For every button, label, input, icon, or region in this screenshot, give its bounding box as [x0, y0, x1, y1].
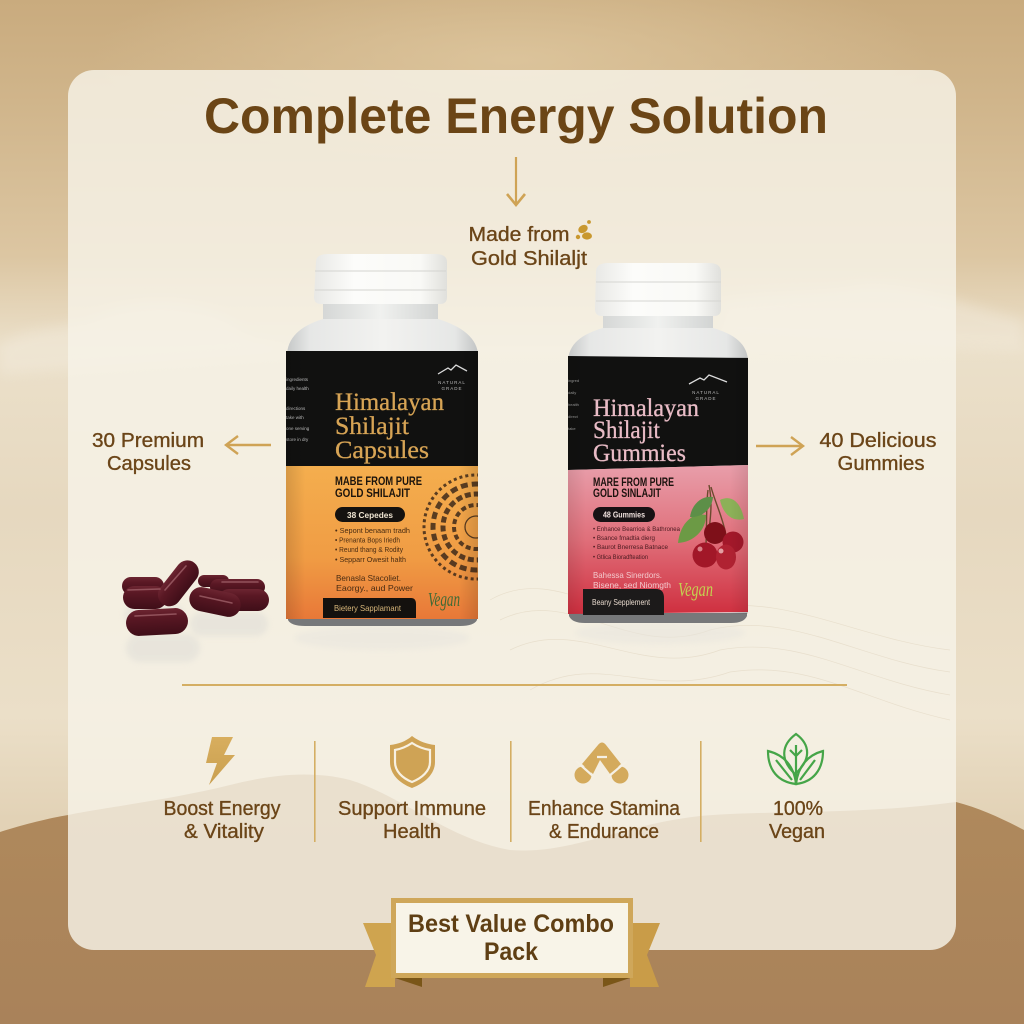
callout: 30 premium capsules — [92, 430, 204, 475]
bottle reflection — [575, 622, 745, 644]
label bullets: • Reund thang & Rodity — [335, 545, 403, 554]
label tagline: Bisene, sed Niomgth — [593, 580, 671, 590]
callout: 30 premium capsules: 30 Premium — [92, 430, 204, 452]
separator — [700, 741, 702, 842]
callout: 30 premium capsules: Capsules — [107, 453, 191, 475]
label bullets: • Gtlica Bioradfteation — [593, 554, 648, 561]
badge text: Best Value Combo — [408, 910, 614, 938]
label headline: GOLD SHILAJIT — [335, 486, 411, 500]
side text: ingredients — [286, 377, 309, 382]
label bullets — [593, 526, 680, 561]
side text: direct — [568, 414, 579, 419]
label black — [568, 356, 748, 470]
badge box — [394, 900, 630, 976]
body shading — [286, 351, 478, 619]
benefit: support immune: Health — [383, 821, 441, 843]
separator — [314, 741, 316, 842]
background hills — [0, 775, 1024, 1024]
side text: take — [568, 426, 576, 431]
product: gummies bottle — [568, 263, 748, 644]
separator — [510, 741, 512, 842]
cap — [314, 254, 447, 304]
bottle base rim — [288, 617, 477, 626]
label headline: MARE FROM PURE — [593, 475, 674, 489]
side text: daily health — [286, 386, 309, 391]
ribbon badge — [363, 900, 660, 987]
ribbon badge: Pack — [484, 938, 538, 966]
label pink — [568, 465, 748, 614]
icon: lightning bolt — [206, 737, 235, 785]
arrow: down to gold shilajit — [507, 157, 525, 205]
capsule highlights — [128, 566, 258, 616]
benefit: vegan: Vegan — [769, 821, 825, 843]
label tagline — [336, 573, 413, 593]
benefit: enhance stamina: & Endurance — [549, 821, 659, 843]
vegan mark: Vegan — [428, 589, 460, 611]
product name: Shilajit — [335, 411, 409, 440]
side text: take with — [286, 415, 304, 420]
benefit: vegan — [768, 734, 825, 843]
cherries illustration — [678, 485, 744, 570]
label headline: GOLD SINLAJIT — [593, 486, 661, 500]
side text: health — [568, 402, 579, 407]
callout: made from gold shilajit — [468, 220, 592, 270]
label bullets: • Enhance Bearrioa & Bathronea — [593, 526, 680, 533]
capsule pile — [122, 556, 269, 662]
callout: 40 delicious gummies — [820, 430, 936, 475]
ribbon tails — [363, 923, 395, 987]
panel — [68, 70, 956, 950]
glass body — [568, 328, 748, 622]
label tagline: Benasla Stacoliet. — [336, 573, 401, 583]
bottle base rim — [569, 613, 747, 623]
neck — [323, 303, 438, 323]
side text: store in dry — [286, 437, 309, 442]
callout: 40 delicious gummies: Gummies — [838, 453, 924, 475]
supplement tab: Beany Sepplement — [592, 597, 651, 607]
side text: ingred — [568, 378, 579, 383]
callout: made from gold shilajit: Made from — [468, 224, 570, 246]
logo: NATURAL — [438, 380, 466, 385]
product name: Gummies — [593, 438, 686, 467]
title: Complete Energy Solution — [204, 88, 828, 144]
label bullets: • Baurot Bnerresa Batnace — [593, 544, 668, 551]
count pill: 48 Gummies — [603, 510, 645, 520]
divider — [182, 684, 847, 686]
label bullets — [335, 526, 410, 564]
label black — [286, 351, 478, 467]
product name — [593, 393, 699, 467]
side text: one serving — [286, 426, 310, 431]
benefit: support immune — [338, 736, 486, 843]
label bullets: • Sepont benaam tradh — [335, 526, 410, 535]
benefit: enhance stamina — [528, 742, 681, 843]
callout: made from gold shilajit: Gold Shilaljt — [471, 248, 587, 270]
benefit: boost energy: Boost Energy — [164, 798, 280, 820]
label tagline — [593, 570, 671, 590]
product name: Shilajit — [593, 415, 660, 444]
capsule reflections — [124, 605, 268, 662]
product name — [335, 387, 444, 464]
arrow: right to gummies — [756, 437, 803, 455]
label headline — [335, 474, 422, 500]
benefit: boost energy — [164, 737, 280, 843]
side text: directions — [286, 406, 306, 411]
label tagline: Eaorgy., aud Power — [336, 583, 413, 593]
label bullets: • Prenanta Bops Iriedh — [335, 536, 400, 544]
product: capsules bottle — [286, 254, 478, 626]
bottle reflection — [294, 626, 470, 650]
label orange — [286, 466, 478, 619]
product name: Himalayan — [593, 393, 699, 422]
body shading — [568, 357, 748, 614]
icon: stamina capsules — [574, 742, 628, 784]
side text — [568, 378, 579, 431]
icon: gold flakes — [576, 220, 592, 240]
icon: shield — [390, 736, 435, 788]
supplement tab: Bietery Sapplamant — [334, 603, 402, 613]
neck — [603, 316, 713, 332]
logo: GRADE — [695, 396, 717, 401]
count pill — [335, 507, 405, 522]
arrow: left to capsules — [226, 436, 271, 454]
glass body — [287, 319, 478, 625]
product name: Capsules — [335, 435, 429, 464]
logo — [438, 365, 467, 391]
label headline — [593, 475, 674, 500]
benefit: vegan: 100% — [773, 798, 823, 820]
side text — [286, 377, 310, 442]
supplement tab — [323, 598, 416, 618]
label tagline: Bahessa Sinerdors. — [593, 570, 662, 580]
callout: 40 delicious gummies: 40 Delicious — [820, 430, 936, 452]
side text: daily — [568, 390, 576, 395]
label headline: MABE FROM PURE — [335, 474, 422, 488]
count pill — [593, 507, 655, 522]
logo — [689, 375, 727, 401]
vegan mark: Vegan — [678, 579, 713, 601]
count pill: 38 Cepedes — [347, 510, 393, 520]
logo: GRADE — [441, 386, 463, 391]
logo: NATURAL — [692, 390, 720, 395]
mandala — [422, 474, 478, 580]
label bullets: • Sepparr Owesit halth — [335, 555, 406, 564]
benefit: enhance stamina: Enhance Stamina — [528, 798, 681, 820]
cap — [595, 263, 721, 316]
product name: Himalayan — [335, 387, 444, 416]
label bullets: • Bsance fmadtia dierg — [593, 535, 655, 542]
decorative contour lines — [490, 589, 950, 720]
supplement tab — [583, 589, 664, 615]
benefit: boost energy: & Vitality — [184, 821, 264, 843]
icon: leaves — [768, 734, 823, 784]
benefit: support immune: Support Immune — [338, 798, 486, 820]
